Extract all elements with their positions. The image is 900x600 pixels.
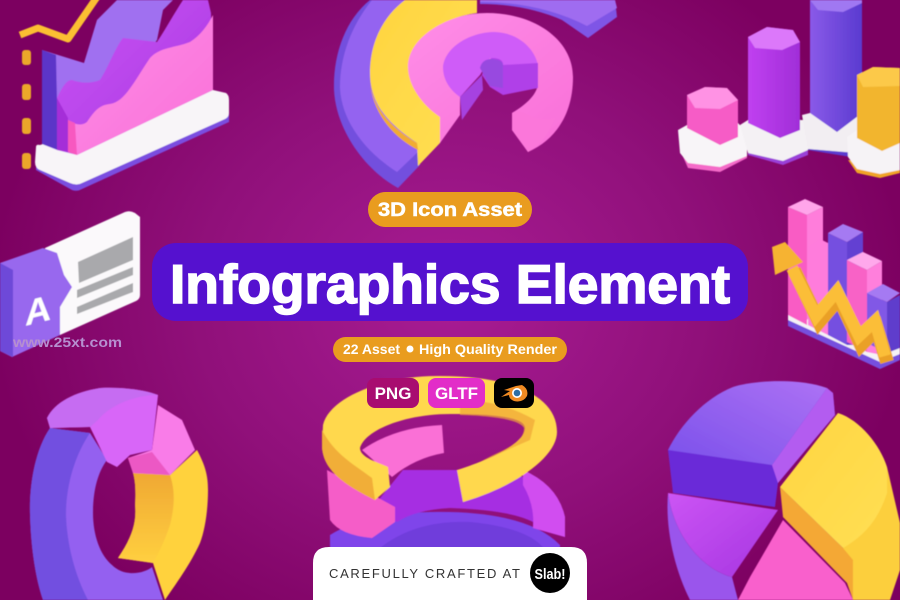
yellow ring — [322, 376, 557, 502]
purple hub — [443, 32, 538, 97]
yellow arrow — [772, 242, 887, 362]
pie chart icon — [667, 381, 900, 600]
Slab logo: Slab! — [534, 566, 566, 583]
pink short bar — [847, 252, 882, 355]
GLTF badge — [428, 378, 485, 408]
pink tall bar — [788, 199, 823, 325]
violet ring — [330, 512, 560, 600]
3D Icon Asset badge: 3D Icon Asset — [378, 200, 523, 221]
PNG badge — [367, 378, 419, 408]
pink segment — [128, 405, 195, 475]
stacked ring icon — [322, 376, 565, 600]
yellow trend line — [20, 0, 97, 39]
pink upper segment — [362, 425, 444, 477]
yellow arc — [370, 0, 477, 166]
subtitle badge — [333, 337, 567, 362]
pink slice — [738, 520, 853, 600]
violet hex bar — [802, 0, 862, 158]
title: Infographics Element — [170, 253, 730, 315]
purple ring — [377, 470, 565, 537]
small bar chart icon — [772, 199, 900, 369]
credit panel: CAREFULLY CRAFTED AT — [329, 566, 520, 581]
purple slice — [667, 493, 738, 600]
purple arrow segment — [47, 388, 158, 467]
pink ring — [398, 13, 573, 152]
base — [788, 308, 900, 366]
GLTF badge: GLTF — [435, 384, 478, 403]
subtitle badge: High Quality Render — [419, 341, 558, 357]
hex bar chart icon — [678, 0, 900, 178]
violet slice — [668, 388, 835, 507]
subtitle badge: 22 Asset — [343, 341, 400, 357]
violet segment — [30, 428, 163, 600]
donut chart icon — [30, 388, 208, 600]
pink mid bar — [808, 239, 828, 335]
violet arc top right — [480, 0, 617, 38]
purple hex bar — [740, 27, 808, 165]
Slab logo — [530, 553, 570, 593]
violet short bar — [867, 284, 900, 353]
violet bar — [828, 224, 863, 345]
yellow segment — [118, 450, 208, 600]
grey text blocks — [77, 237, 133, 314]
violet arc — [334, 0, 420, 188]
semicircle chart icon — [334, 0, 617, 188]
yellow hex bar — [847, 67, 900, 178]
Blender logo badge — [494, 378, 534, 408]
pink hex bar — [678, 87, 747, 172]
label card icon — [0, 211, 140, 357]
letter A: A — [25, 287, 51, 334]
3D Icon Asset badge — [368, 192, 532, 227]
dashed axis — [22, 50, 31, 169]
credit panel — [313, 547, 587, 600]
PNG badge: PNG — [375, 384, 411, 403]
area chart icon — [20, 0, 229, 191]
watermark: www.25xt.com — [12, 334, 122, 350]
yellow slice — [843, 467, 900, 600]
pink lower segment — [327, 470, 395, 538]
